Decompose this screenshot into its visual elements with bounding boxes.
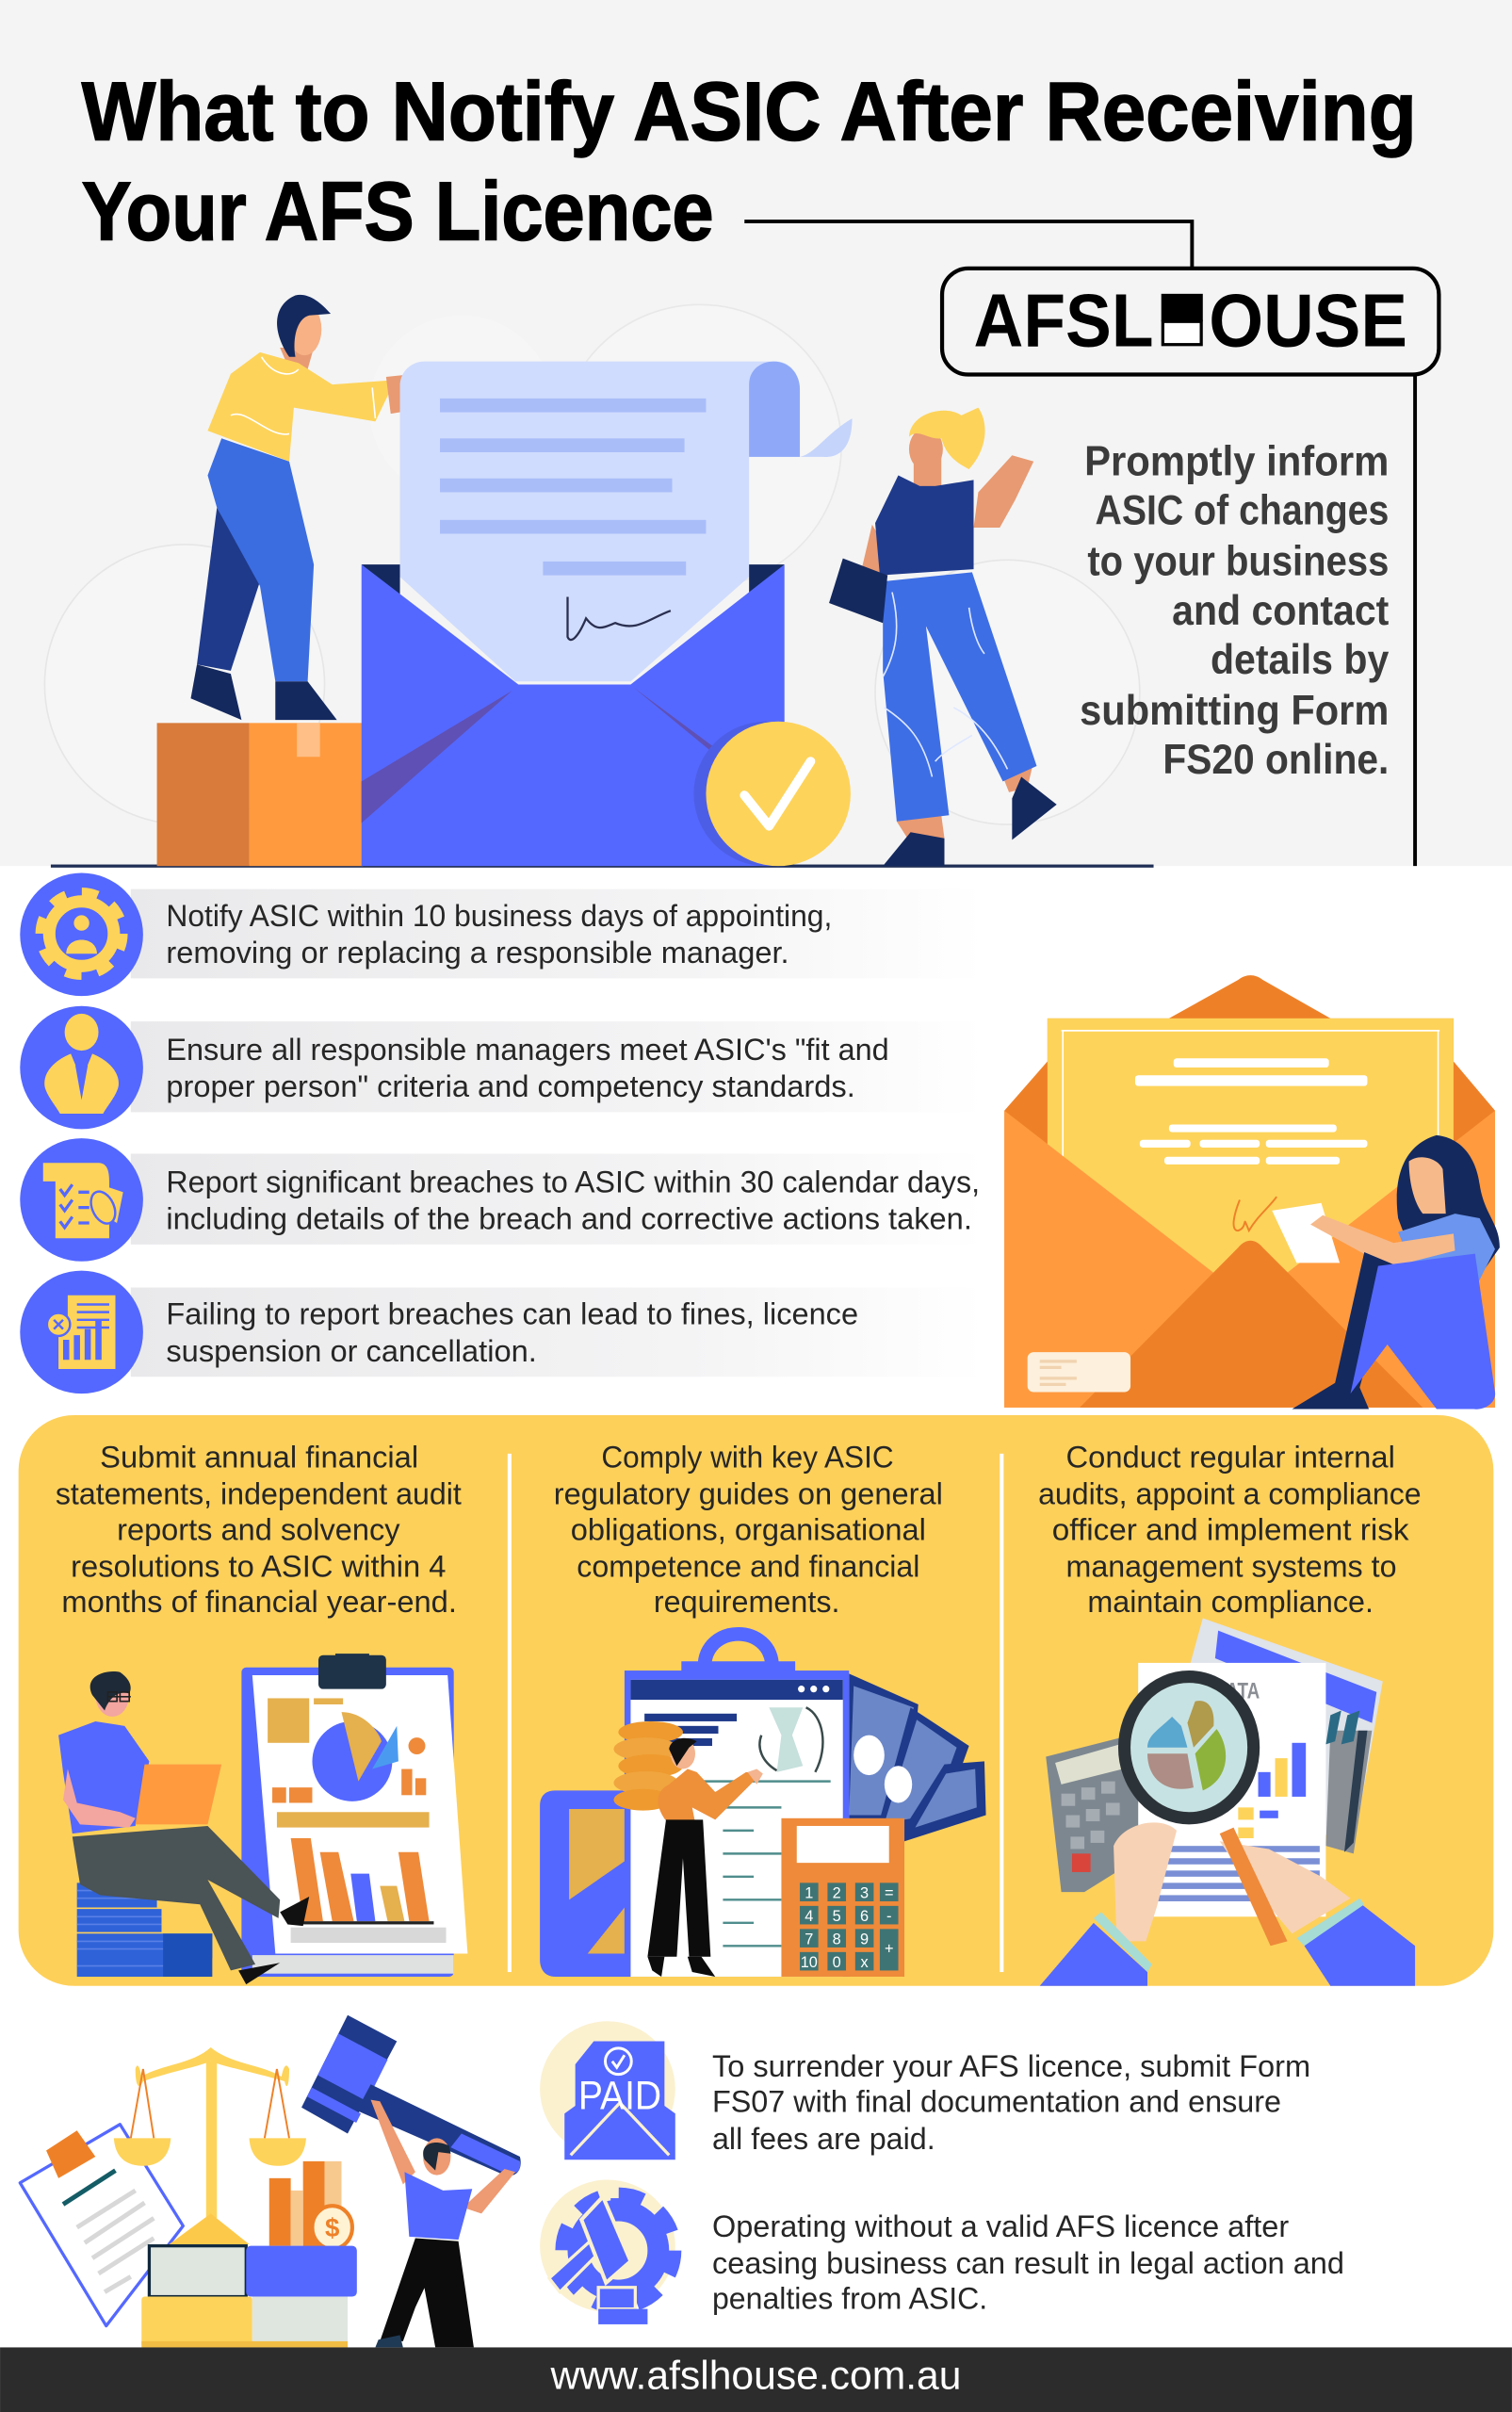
text: surrender licence: To surrender your AFS licence, submit Form <box>712 2049 1310 2083</box>
item 4: penalties <box>20 1271 984 1393</box>
text: internal audits <box>1038 1441 1422 1619</box>
item 3: report breaches: including details of the breach and corrective actions taken. <box>166 1201 972 1235</box>
item 1: responsible manager: Notify ASIC within 10 business days of appointing, <box>166 899 832 933</box>
illustration: woman with clipboard, coins and calculator: 4 <box>805 1908 813 1925</box>
illustration: letter <box>400 362 853 681</box>
title <box>82 65 1417 258</box>
logo: AFSL House: OUSE <box>1209 278 1407 362</box>
text: regulatory guides: requirements. <box>654 1585 839 1619</box>
item 4: penalties: suspension or cancellation. <box>166 1334 537 1368</box>
illustration: envelope <box>362 564 785 866</box>
item 1: responsible manager: removing or replacing a responsible manager. <box>166 936 789 970</box>
text: annual financial statements: reports and solvency <box>117 1512 400 1546</box>
illustration: woman with clipboard, coins and calculator: + <box>885 1940 893 1957</box>
item 2: fit and proper person <box>20 1006 984 1129</box>
text: regulatory guides: regulatory guides on general <box>554 1477 943 1511</box>
text: internal audits: officer and implement risk <box>1052 1512 1410 1546</box>
item 3: report breaches: Report significant breaches to ASIC within 30 calendar days, <box>166 1165 980 1198</box>
text: promptly inform: details by <box>1211 637 1390 683</box>
text: annual financial statements <box>56 1441 462 1619</box>
footer: website: www.afslhouse.com.au <box>550 2354 961 2398</box>
illustration: man holding gavel <box>301 2015 521 2347</box>
illustration: scales, gavel and books <box>20 2047 357 2347</box>
illustration: woman with clipboard, coins and calculator: 0 <box>833 1954 841 1971</box>
panel: header <box>0 0 1512 868</box>
illustration: woman with tablet <box>829 408 1057 866</box>
text: promptly inform: FS20 online. <box>1162 737 1389 783</box>
illustration: woman with clipboard, coins and calculator: x <box>861 1954 869 1971</box>
text: promptly inform: and contact <box>1172 588 1390 634</box>
text: promptly inform: submitting Form <box>1080 688 1389 734</box>
text: promptly inform: ASIC of changes <box>1095 488 1389 534</box>
title: What to Notify ASIC After Receiving <box>82 65 1417 158</box>
logo: AFSL House <box>942 269 1439 375</box>
text: regulatory guides: obligations, organisational <box>571 1512 926 1546</box>
text: operating without a licence: ceasing business can result in legal action and <box>712 2246 1344 2280</box>
illustration: magnifier audit with calculator and hands <box>1040 1619 1415 1986</box>
text: regulatory guides: Comply with key ASIC <box>601 1441 894 1475</box>
item 1: responsible manager <box>20 873 984 996</box>
icon: paid envelope: PAID <box>578 2073 661 2117</box>
illustration: woman with clipboard, coins and calculator: = <box>885 1885 893 1902</box>
icon: check badge <box>693 722 851 866</box>
illustration: woman with clipboard, coins and calculator: 10 <box>801 1954 818 1971</box>
text: internal audits: audits, appoint a compliance <box>1038 1477 1422 1511</box>
connector from title to logo <box>744 221 1192 268</box>
text: annual financial statements: resolutions to ASIC within 4 <box>71 1549 447 1583</box>
text: surrender licence: all fees are paid. <box>712 2122 935 2156</box>
illustration: woman with clipboard, coins and calculator: 6 <box>860 1908 869 1925</box>
icon: paid envelope <box>540 2021 675 2159</box>
illustration: man with letter <box>190 295 415 720</box>
icon: gavel gear <box>540 2179 675 2324</box>
text: promptly inform <box>1080 438 1390 783</box>
illustration: magnifier audit with calculator and hands: ATA <box>1226 1678 1260 1703</box>
illustration: woman with clipboard, coins and calculator: 3 <box>860 1885 869 1902</box>
illustration: woman with clipboard, coins and calculator <box>540 1634 986 1977</box>
illustration: cardboard box <box>157 723 363 866</box>
text: operating without a licence: Operating without a valid AFS licence after <box>712 2209 1290 2243</box>
illustration: woman with clipboard, coins and calculator: 8 <box>833 1931 841 1948</box>
text: internal audits: management systems to <box>1065 1549 1396 1583</box>
text: promptly inform: to your business <box>1087 539 1389 585</box>
illustration: woman with clipboard, coins and calculator: 7 <box>805 1931 813 1948</box>
panel: notification list <box>20 873 984 1393</box>
illustration: man with laptop and report board <box>58 1654 467 1984</box>
logo: AFSL House: AFSL <box>974 278 1154 362</box>
text: promptly inform: Promptly inform <box>1084 438 1389 484</box>
connector from logo to base line <box>1414 375 1416 866</box>
text: internal audits: maintain compliance. <box>1087 1585 1374 1619</box>
text: operating without a licence <box>712 2209 1344 2316</box>
text: internal audits: Conduct regular internal <box>1065 1441 1395 1475</box>
footer: website <box>0 2347 1512 2412</box>
panel: yellow obligations <box>19 1415 1493 1986</box>
illustration: woman with clipboard, coins and calculator: 2 <box>833 1885 841 1902</box>
item 2: fit and proper person: Ensure all responsible managers meet ASIC's "fit and <box>166 1033 889 1067</box>
text: surrender licence: FS07 with final documentation and ensure <box>712 2085 1281 2119</box>
text: regulatory guides: competence and financial <box>577 1549 919 1583</box>
text: annual financial statements: statements, independent audit <box>56 1477 462 1511</box>
text: operating without a licence: penalties from ASIC. <box>712 2282 987 2316</box>
text: annual financial statements: Submit annual financial <box>100 1441 418 1475</box>
illustration: woman with clipboard, coins and calculator: 5 <box>833 1908 841 1925</box>
illustration: scales, gavel and books: $ <box>325 2213 340 2242</box>
illustration: woman with clipboard, coins and calculator: 1 <box>805 1885 813 1902</box>
item 4: penalties: Failing to report breaches can lead to fines, licence <box>166 1297 858 1331</box>
item 3: report breaches <box>20 1138 984 1262</box>
text: regulatory guides <box>554 1441 943 1619</box>
item 2: fit and proper person: proper person" criteria and competency standards. <box>166 1069 855 1103</box>
illustration: woman with clipboard, coins and calculator: 9 <box>860 1931 869 1948</box>
text: surrender licence <box>712 2049 1310 2156</box>
illustration: orange envelope with seated woman <box>1004 975 1500 1410</box>
text: annual financial statements: months of financial year-end. <box>61 1585 457 1619</box>
title: Your AFS Licence <box>82 165 714 258</box>
illustration: woman with clipboard, coins and calculator: - <box>886 1908 891 1925</box>
